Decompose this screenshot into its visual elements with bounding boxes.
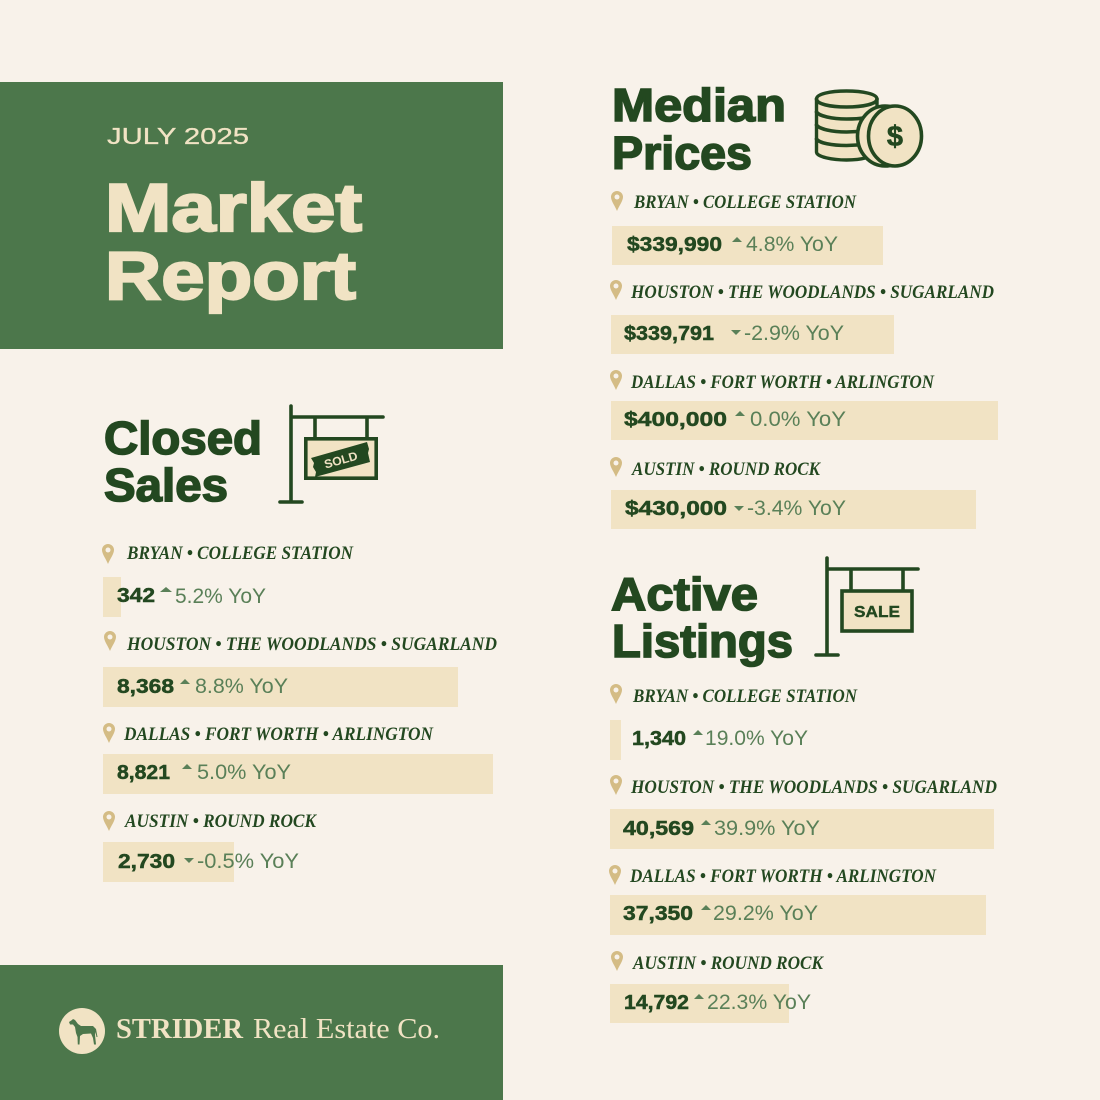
row: closed sales houston: 8.8% YoY: [195, 675, 288, 698]
icon: sale sign: [816, 558, 918, 655]
row: active dallas: DALLAS • FORT WORTH • ARLINGTON: [629, 866, 937, 887]
row: active bryan: 19.0% YoY: [705, 727, 808, 750]
heading: closed sales: Closed: [104, 412, 262, 464]
row: median houston: HOUSTON • THE WOODLANDS • SUGARLAND: [630, 282, 994, 303]
row: active houston: 39.9% YoY: [714, 817, 820, 840]
row: closed sales houston: [103, 631, 497, 707]
panel: closed sales: [102, 406, 497, 882]
date label: JULY 2025: [107, 123, 249, 149]
title panel: [0, 82, 503, 349]
row: active houston: HOUSTON • THE WOODLANDS • SUGARLAND: [630, 777, 997, 798]
row: closed sales dallas: [103, 723, 493, 794]
heading: median prices: Prices: [612, 127, 752, 179]
heading: closed sales: Sales: [104, 459, 228, 511]
panel: median prices: [610, 79, 998, 529]
row: median dallas: $400,000: [624, 409, 727, 431]
row: median bryan: BRYAN • COLLEGE STATION: [633, 192, 857, 213]
row: active bryan: [610, 684, 858, 760]
row: closed sales houston: HOUSTON • THE WOODLANDS • SUGARLAND: [126, 634, 497, 655]
row: closed sales bryan: 342: [117, 585, 155, 607]
row: median dallas: 0.0% YoY: [750, 408, 846, 431]
row: median bryan: [611, 191, 883, 265]
row: active austin: 22.3% YoY: [707, 991, 811, 1014]
row: median austin: -3.4% YoY: [747, 497, 846, 520]
title: Report: [105, 238, 356, 314]
row: closed sales dallas: 5.0% YoY: [197, 761, 291, 784]
heading: active listings: Active: [611, 568, 758, 620]
brand name: STRIDER: [116, 1013, 244, 1045]
row: active bryan: 1,340: [632, 728, 686, 750]
row: closed sales dallas: 8,821: [117, 762, 170, 784]
row: closed sales houston: 8,368: [117, 676, 174, 698]
row: median houston: $339,791: [624, 323, 714, 345]
heading: median prices: Median: [612, 79, 786, 131]
row: median bryan: 4.8% YoY: [746, 233, 838, 256]
row: closed sales bryan: BRYAN • COLLEGE STATION: [126, 543, 354, 564]
row: closed sales austin: AUSTIN • ROUND ROCK: [124, 811, 317, 832]
panel: active listings: [609, 558, 997, 1023]
icon: horse logo: [59, 1008, 105, 1054]
icon: sold sign: SOLD: [323, 449, 359, 472]
row: median houston: -2.9% YoY: [744, 322, 844, 345]
title: [105, 170, 362, 314]
heading: active listings: Listings: [612, 615, 793, 667]
brand name: Real Estate Co.: [253, 1013, 440, 1045]
heading: closed sales: [104, 412, 262, 511]
row: median houston: [610, 280, 994, 354]
icon: coins: [816, 91, 922, 166]
row: active austin: [610, 951, 824, 1023]
footer panel: [0, 965, 503, 1100]
row: median dallas: [610, 370, 998, 440]
row: median austin: [610, 457, 976, 529]
row: active austin: AUSTIN • ROUND ROCK: [632, 953, 824, 974]
heading: median prices: [612, 79, 786, 179]
heading: active listings: [611, 568, 793, 667]
title: Market: [105, 170, 362, 246]
row: closed sales austin: [103, 811, 317, 882]
row: active houston: 40,569: [623, 818, 694, 840]
icon: sold sign: [280, 406, 383, 502]
row: closed sales austin: 2,730: [118, 851, 175, 873]
row: closed sales dallas: DALLAS • FORT WORTH • ARLINGTON: [123, 724, 434, 745]
row: active dallas: 29.2% YoY: [713, 902, 818, 925]
icon: sale sign: SALE: [854, 604, 900, 621]
row: active dallas: 37,350: [623, 903, 693, 925]
brand name: [116, 1013, 440, 1045]
row: closed sales austin: -0.5% YoY: [197, 850, 299, 873]
row: active bryan: BRYAN • COLLEGE STATION: [632, 686, 858, 707]
row: active houston: [610, 775, 997, 849]
row: median austin: AUSTIN • ROUND ROCK: [631, 459, 821, 480]
row: median dallas: DALLAS • FORT WORTH • ARLINGTON: [630, 372, 935, 393]
row: closed sales bryan: [102, 543, 354, 617]
row: closed sales bryan: 5.2% YoY: [175, 585, 266, 608]
icon: coins: $: [887, 121, 903, 153]
row: median austin: $430,000: [625, 498, 727, 520]
row: active austin: 14,792: [624, 992, 689, 1014]
row: median bryan: $339,990: [627, 234, 722, 256]
row: active dallas: [609, 865, 986, 935]
